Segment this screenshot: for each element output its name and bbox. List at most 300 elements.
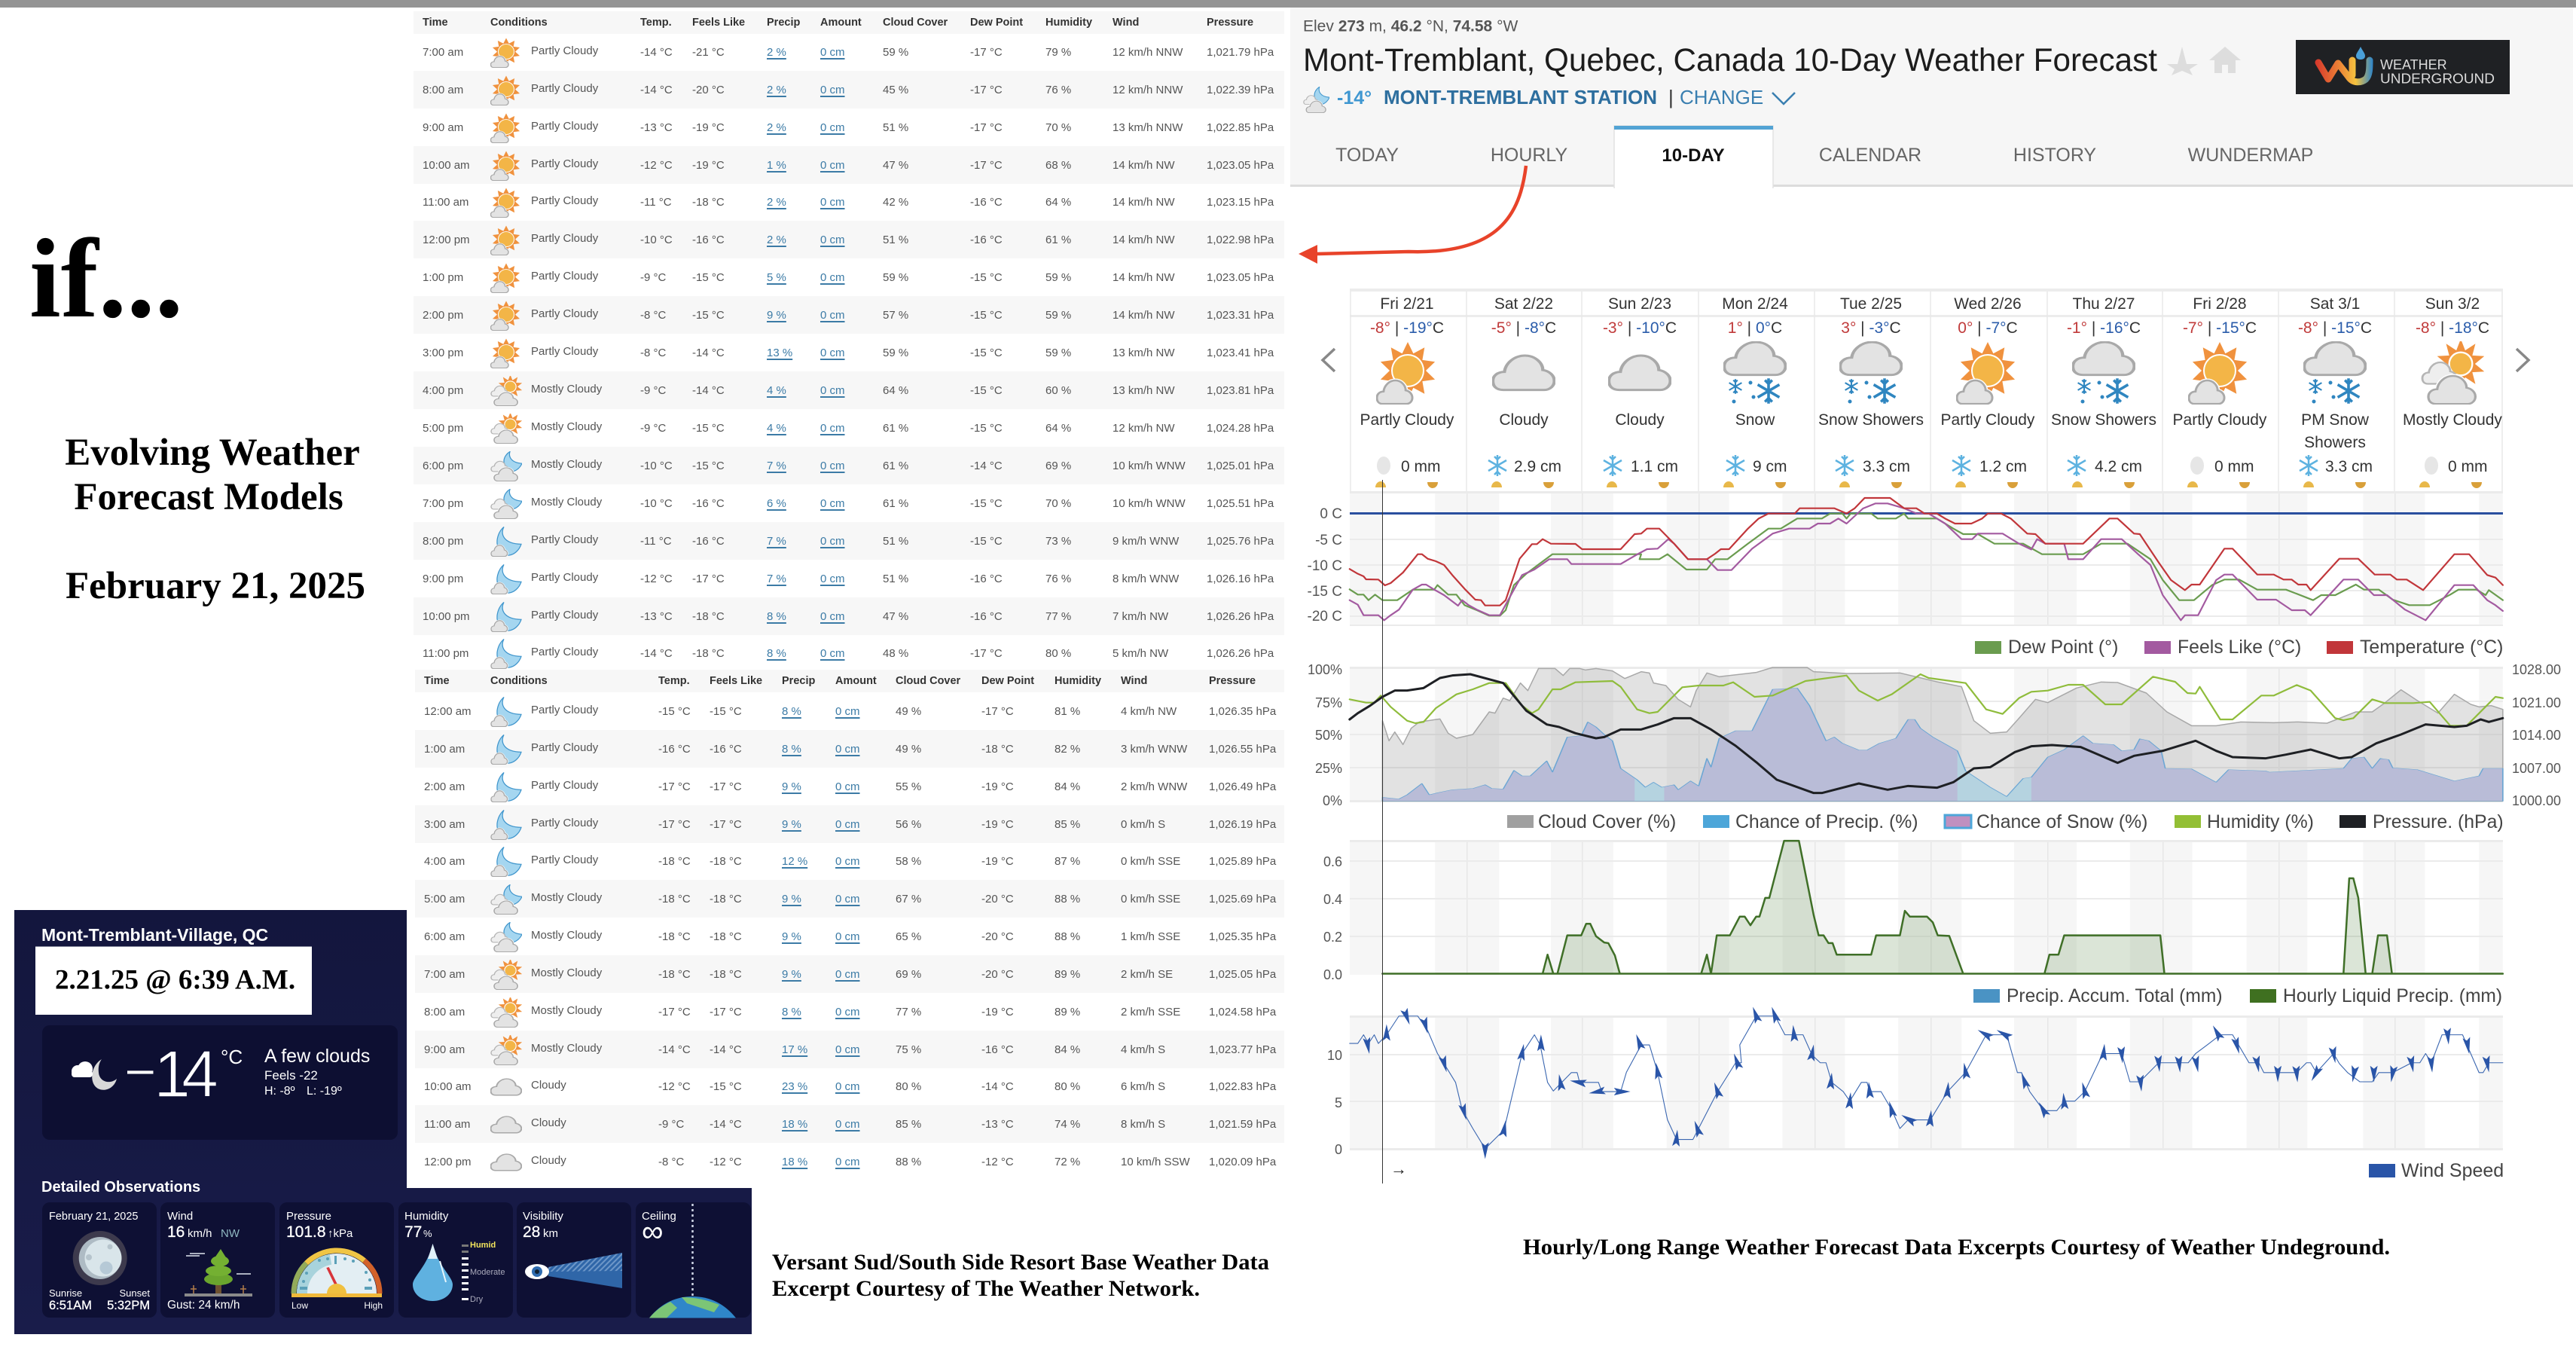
icon: star <box>2167 47 2198 75</box>
row: 9:00 am: 0 cm <box>820 121 845 134</box>
temperature axis labels: -10 C <box>1308 558 1342 574</box>
card: pressure: High <box>364 1300 383 1311</box>
row: 12:00 pm <box>414 221 1284 258</box>
precipitation legend: Hourly Liquid Precip. (mm) <box>2283 986 2502 1006</box>
row: 10:00 pm: 10:00 pm <box>423 610 470 623</box>
card: date and moon: 5:32PM <box>107 1299 150 1312</box>
condition text: H: -8º <box>264 1085 295 1098</box>
pressure axis labels: 1014.00 <box>2512 728 2561 743</box>
row: 7:00 am: 89 % <box>1055 968 1080 981</box>
row: 5:00 am: 0 cm <box>835 893 860 906</box>
row: 3:00 am <box>415 805 1284 843</box>
row: 2:00 am: -17 °C <box>658 780 691 793</box>
day: Wed 2/26: Partly Cloudy <box>1941 411 2035 429</box>
cloud and precipitation legend: Cloud Cover (%) <box>1538 812 1676 832</box>
row: 5:00 pm: 1,024.28 hPa <box>1207 422 1274 435</box>
logo: Weather Underground: WEATHER <box>2380 57 2447 72</box>
row: 9:00 am: 4 km/h S <box>1121 1043 1165 1056</box>
day: Tue 2/25: 3.3 cm <box>1863 458 1910 475</box>
day: Fri 2/28: Fri 2/28 <box>2193 295 2247 313</box>
day: Sun 2/23: Cloudy <box>1615 411 1665 429</box>
row: 11:00 am: 0 cm <box>835 1118 860 1131</box>
row: 1:00 am: 0 cm <box>835 743 860 756</box>
row: 10:00 am: -17 °C <box>970 159 1003 172</box>
current time marker line <box>1382 480 1383 1183</box>
table header row: Feels Like <box>692 17 745 29</box>
row: 3:00 am: 9 % <box>782 818 801 831</box>
card: wind: km/h <box>188 1227 212 1240</box>
card: date and moon: Sunset <box>120 1287 150 1299</box>
navigation tabs: 10-DAY <box>1662 145 1725 166</box>
day: Sat 3/1: PM Snow <box>2301 411 2370 429</box>
row: 5:00 am: 67 % <box>896 893 921 906</box>
row: 8:00 am: 8 % <box>782 1006 801 1019</box>
temperature: – <box>127 1043 154 1095</box>
day: Sat 2/22 <box>1488 295 1561 488</box>
row: 5:00 am <box>415 880 1284 918</box>
row: 11:00 am: 1,021.59 hPa <box>1209 1118 1276 1131</box>
row: 6:00 am: 88 % <box>1055 930 1080 943</box>
table header row: Pressure <box>1209 675 1256 687</box>
row: 1:00 pm: 14 km/h NW <box>1113 271 1175 284</box>
day: Fri 2/21: Partly Cloudy <box>1360 411 1454 429</box>
day: Fri 2/21: 0 mm <box>1401 458 1440 475</box>
row: 2:00 pm: 57 % <box>883 309 908 322</box>
caption: Weather Network credit: Versant Sud/South Side Resort Base Weather Data <box>772 1250 1269 1275</box>
row: 10:00 pm <box>414 597 1284 635</box>
row: 9:00 pm: -16 °C <box>970 573 1003 585</box>
row: 9:00 am <box>423 113 1274 143</box>
day: Sun 3/2: 0 mm <box>2448 458 2487 475</box>
row: 2:00 pm <box>414 296 1284 334</box>
row: 8:00 am: 0 cm <box>820 84 845 96</box>
row: 4:00 am: Partly Cloudy <box>531 854 598 866</box>
row: 7:00 pm: Mostly Cloudy <box>531 496 602 508</box>
row: 11:00 pm <box>423 639 1274 669</box>
temperature line <box>1350 498 2503 606</box>
row: 11:00 pm: 0 cm <box>820 647 845 660</box>
card: ceiling <box>636 1202 751 1318</box>
temperature axis labels: -15 C <box>1308 584 1342 600</box>
row: 6:00 pm: -14 °C <box>970 460 1003 472</box>
table header row: Humidity <box>1045 17 1092 29</box>
row: 12:00 am: 8 % <box>782 705 801 718</box>
small direction arrow: → <box>1390 1159 1407 1178</box>
row: 2:00 am <box>424 772 1276 802</box>
row: 5:00 am: Mostly Cloudy <box>531 891 602 904</box>
card: pressure: Low <box>291 1300 308 1311</box>
row: 5:00 am: 9 % <box>782 893 801 906</box>
navigation tabs: HISTORY <box>2013 145 2096 166</box>
row: 10:00 am: -12 °C <box>658 1080 691 1093</box>
day: Thu 2/27: 4.2 cm <box>2095 458 2142 475</box>
temperature unit: °C <box>221 1046 243 1068</box>
row: 11:00 am: -11 °C <box>640 196 672 209</box>
row: 2:00 am: 1,026.49 hPa <box>1209 780 1276 793</box>
row: 9:00 am <box>415 1031 1284 1068</box>
row: 6:00 am: Mostly Cloudy <box>531 929 602 942</box>
row: 11:00 am: 18 % <box>782 1118 807 1131</box>
condition text: A few clouds <box>264 1046 370 1067</box>
row: 8:00 am <box>424 997 1276 1028</box>
table header row: Conditions <box>490 17 548 29</box>
table header row: Feels Like <box>710 675 762 687</box>
row: 9:00 pm <box>423 564 1274 594</box>
row: 9:00 pm: -17 °C <box>692 573 725 585</box>
day: Fri 2/21: -8° | -19°C <box>1370 319 1444 337</box>
pressure axis labels: 1028.00 <box>2512 662 2561 677</box>
row: 12:00 am: -17 °C <box>981 705 1014 718</box>
wind axis labels <box>1327 1048 1342 1157</box>
card: pressure: 101.8 <box>286 1223 326 1241</box>
row: 8:00 am: 89 % <box>1055 1006 1080 1019</box>
row: 6:00 am <box>424 922 1276 952</box>
day: Sat 2/22: -5° | -8°C <box>1491 319 1556 337</box>
row: 7:00 am: -18 °C <box>658 968 691 981</box>
logo: Weather Underground <box>2296 40 2510 94</box>
temperature legend: Dew Point (°) <box>2008 637 2118 658</box>
row: 8:00 am: Mostly Cloudy <box>531 1004 602 1017</box>
row: 12:00 am: -15 °C <box>658 705 691 718</box>
row: 5:00 pm <box>423 414 1274 444</box>
day: Sun 2/23: -3° | -10°C <box>1603 319 1677 337</box>
row: 3:00 pm: 59 % <box>1045 347 1071 359</box>
row: 11:00 pm: 1,026.26 hPa <box>1207 647 1274 660</box>
row: 12:00 pm: 1,020.09 hPa <box>1209 1156 1276 1168</box>
elevation line: Elev 273 m, 46.2 °N, 74.58 °W <box>1303 18 1518 35</box>
row: 5:00 am: -18 °C <box>658 893 691 906</box>
row: 9:00 am: 13 km/h NNW <box>1113 121 1183 134</box>
row: 4:00 am: -18 °C <box>658 855 691 868</box>
pressure axis labels: 1007.00 <box>2512 761 2561 776</box>
table header row: Cloud Cover <box>896 675 960 687</box>
navigation tabs <box>1335 126 2313 188</box>
row: 5:00 pm: 64 % <box>1045 422 1071 435</box>
row: 10:00 am: 0 cm <box>820 159 845 172</box>
day: Sun 3/2 <box>2403 295 2502 488</box>
table header row: Conditions <box>490 675 548 687</box>
day: Wed 2/26: 0° | -7°C <box>1958 319 2018 337</box>
day: Sun 3/2: Mostly Cloudy <box>2403 411 2502 429</box>
location heading: Mont-Tremblant-Village, QC <box>41 925 268 945</box>
card: humidity <box>398 1202 513 1318</box>
row: 4:00 pm: 4 % <box>767 384 786 397</box>
row: 12:00 pm: 51 % <box>883 234 908 246</box>
row: 9:00 am: 84 % <box>1055 1043 1080 1056</box>
row: 5:00 am: -18 °C <box>710 893 742 906</box>
row: 7:00 am: Mostly Cloudy <box>531 967 602 979</box>
row: 6:00 pm: 1,025.01 hPa <box>1207 460 1274 472</box>
row: 12:00 pm: -10 °C <box>640 234 673 246</box>
table header row: Temp. <box>640 17 672 29</box>
row: 10:00 am <box>414 146 1284 184</box>
row: 10:00 pm: 47 % <box>883 610 908 623</box>
row: 7:00 am: -21 °C <box>692 46 725 59</box>
row: 8:00 am: -17 °C <box>970 84 1003 96</box>
row: 1:00 pm: 59 % <box>883 271 908 284</box>
row: 10:00 pm: 7 km/h NW <box>1113 610 1168 623</box>
table header row: Amount <box>820 17 862 29</box>
row: 9:00 pm: -12 °C <box>640 573 673 585</box>
row: 6:00 pm: 69 % <box>1045 460 1071 472</box>
row: 3:00 am: 0 cm <box>835 818 860 831</box>
row: 1:00 am: 8 % <box>782 743 801 756</box>
row: 1:00 pm: -15 °C <box>692 271 725 284</box>
row: 4:00 am: 87 % <box>1055 855 1080 868</box>
row: 12:00 pm: 61 % <box>1045 234 1071 246</box>
row: 7:00 am: -20 °C <box>981 968 1014 981</box>
row: 7:00 pm: 7:00 pm <box>423 497 463 510</box>
condition text: Feels -22 <box>264 1068 318 1083</box>
row: 8:00 am: 12 km/h NNW <box>1113 84 1183 96</box>
row: 1:00 pm: 1:00 pm <box>423 271 463 284</box>
row: 6:00 pm: 61 % <box>883 460 908 472</box>
row: 9:00 am: 70 % <box>1045 121 1071 134</box>
day: Tue 2/25: Tue 2/25 <box>1840 295 1902 313</box>
day: Sun 3/2: -8° | -18°C <box>2416 319 2489 337</box>
row: 11:00 am <box>415 1105 1284 1143</box>
row: 9:00 am: 9:00 am <box>423 121 463 134</box>
row: 11:00 pm: 11:00 pm <box>423 647 469 660</box>
row: 2:00 am: 55 % <box>896 780 921 793</box>
cloud and precipitation legend <box>1507 812 2504 832</box>
row: 7:00 am: -17 °C <box>970 46 1003 59</box>
day: Sat 3/1 <box>2298 295 2373 488</box>
day: Thu 2/27: Snow Showers <box>2051 411 2156 429</box>
row: 1:00 pm: -9 °C <box>640 271 666 284</box>
row: 12:00 pm: -16 °C <box>692 234 725 246</box>
row: 1:00 pm: Partly Cloudy <box>531 270 598 282</box>
table header row: Time <box>424 675 450 687</box>
row: 1:00 am: 82 % <box>1055 743 1080 756</box>
row: 10:00 am: -12 °C <box>640 159 673 172</box>
row: 10:00 am: 14 km/h NW <box>1113 159 1175 172</box>
card: pressure <box>279 1202 394 1318</box>
row: 4:00 pm <box>414 371 1284 409</box>
current conditions card <box>42 1025 398 1140</box>
row: 4:00 pm: -14 °C <box>692 384 725 397</box>
row: 12:00 pm: 10 km/h SSW <box>1121 1156 1190 1168</box>
row: 12:00 am: 4 km/h NW <box>1121 705 1177 718</box>
row: 2:00 pm: -15 °C <box>692 309 725 322</box>
row: 9:00 pm: 76 % <box>1045 573 1071 585</box>
day: Thu 2/27 <box>2051 295 2156 488</box>
precipitation legend <box>1973 986 2502 1006</box>
row: 6:00 pm: 0 cm <box>820 460 845 472</box>
row: 8:00 pm: 0 cm <box>820 535 845 548</box>
row: 3:00 pm: -8 °C <box>640 347 666 359</box>
row: 8:00 am: 1,024.58 hPa <box>1209 1006 1276 1019</box>
row: 7:00 am: 1,025.05 hPa <box>1209 968 1276 981</box>
row: 9:00 am: 51 % <box>883 121 908 134</box>
card: humidity: % <box>423 1228 432 1239</box>
day: Sat 3/1: Sat 3/1 <box>2310 295 2360 313</box>
row: 7:00 am: 2 km/h SE <box>1121 968 1173 981</box>
row: 11:00 am: -9 °C <box>658 1118 684 1131</box>
row: 11:00 am: -14 °C <box>710 1118 742 1131</box>
row: 8:00 pm: 73 % <box>1045 535 1071 548</box>
row: 9:00 pm: 9:00 pm <box>423 573 463 585</box>
row: 12:00 am: 12:00 am <box>424 705 472 718</box>
row: 11:00 pm: Partly Cloudy <box>531 646 598 658</box>
row: 2:00 pm: 0 cm <box>820 309 845 322</box>
percent axis labels <box>1308 662 1342 808</box>
row: 6:00 am: -18 °C <box>658 930 691 943</box>
row: 1:00 am: -16 °C <box>710 743 742 756</box>
row: 8:00 am: -20 °C <box>692 84 725 96</box>
row: 4:00 pm: 64 % <box>883 384 908 397</box>
row: 9:00 am: -13 °C <box>640 121 673 134</box>
row: 5:00 am: 5:00 am <box>424 893 465 906</box>
row: 8:00 pm: 1,025.76 hPa <box>1207 535 1274 548</box>
row: 5:00 pm: -9 °C <box>640 422 666 435</box>
row: 2:00 pm: -8 °C <box>640 309 666 322</box>
row: 2:00 am: 2 km/h WNW <box>1121 780 1187 793</box>
row: 11:00 am: 1,023.15 hPa <box>1207 196 1274 209</box>
row: 8:00 pm: 9 km/h WNW <box>1113 535 1179 548</box>
day: Sun 3/2: Sun 3/2 <box>2425 295 2480 313</box>
row: 2:00 am: Partly Cloudy <box>531 779 598 792</box>
card: date and moon: February 21, 2025 <box>49 1211 139 1223</box>
row: 7:00 am: 1,021.79 hPa <box>1207 46 1274 59</box>
row: 4:00 pm: Mostly Cloudy <box>531 383 602 396</box>
row: 12:00 pm: Partly Cloudy <box>531 232 598 245</box>
row: 3:00 am: 1,026.19 hPa <box>1209 818 1276 831</box>
row: 10:00 pm: -16 °C <box>970 610 1003 623</box>
card: wind: Gust: 24 km/h <box>167 1299 240 1312</box>
percent axis labels: 75% <box>1315 695 1342 710</box>
temperature axis labels <box>1308 506 1342 625</box>
row: 7:00 pm: 0 cm <box>820 497 845 510</box>
row: 10:00 am: 80 % <box>1055 1080 1080 1093</box>
cloud and precipitation legend: Pressure. (hPa) <box>2373 812 2504 832</box>
caption: Weather Underground credit: Hourly/Long Range Weather Forecast Data Excerpts Courtesy of Weather Undeground. <box>1523 1235 2390 1260</box>
row: 6:00 am: -20 °C <box>981 930 1014 943</box>
table header row: Humidity <box>1055 675 1101 687</box>
row: 11:00 am: 0 cm <box>820 196 845 209</box>
day: Fri 2/28: 0 mm <box>2214 458 2254 475</box>
row: 9:00 pm: 8 km/h WNW <box>1113 573 1179 585</box>
row: 9:00 am: -17 °C <box>970 121 1003 134</box>
row: 3:00 am: 0 km/h S <box>1121 818 1165 831</box>
wind axis labels: 0 <box>1335 1142 1342 1157</box>
row: 10:00 am: 1,022.83 hPa <box>1209 1080 1276 1093</box>
row: 1:00 pm <box>423 264 1274 293</box>
table header row: Wind <box>1121 675 1147 687</box>
row: 8:00 am: 8:00 am <box>424 1006 465 1019</box>
hourly liquid precipitation area <box>1382 841 2503 973</box>
row: 12:00 am: 49 % <box>896 705 921 718</box>
timestamp box: 2.21.25 @ 6:39 A.M. <box>55 965 295 996</box>
row: 7:00 pm: 70 % <box>1045 497 1071 510</box>
row: 12:00 am <box>424 697 1276 727</box>
row: 12:00 am: Partly Cloudy <box>531 704 598 716</box>
row: 12:00 pm: 18 % <box>782 1156 807 1168</box>
row: 11:00 am: 8 km/h S <box>1121 1118 1165 1131</box>
row: 3:00 pm: -15 °C <box>970 347 1003 359</box>
row: 7:00 am: 79 % <box>1045 46 1071 59</box>
row: 12:00 pm: -12 °C <box>710 1156 742 1168</box>
page title: Mont-Tremblant, Quebec, Canada 10-Day Weather Forecast <box>1303 42 2157 78</box>
row: 10:00 am: 47 % <box>883 159 908 172</box>
row: 12:00 pm: -16 °C <box>970 234 1003 246</box>
row: 9:00 am: Partly Cloudy <box>531 120 598 133</box>
row: 11:00 am: -18 °C <box>692 196 725 209</box>
row: 5:00 pm: 61 % <box>883 422 908 435</box>
icon: moon and cloud <box>72 1059 117 1090</box>
percent axis labels: 100% <box>1308 662 1342 677</box>
day: Thu 2/27: Thu 2/27 <box>2073 295 2135 313</box>
row: 9:00 pm: 51 % <box>883 573 908 585</box>
row: 2:00 pm: -15 °C <box>970 309 1003 322</box>
icon: full moon <box>73 1231 127 1285</box>
navigation tabs: CALENDAR <box>1819 145 1921 166</box>
row: 12:00 pm: -12 °C <box>981 1156 1014 1168</box>
pressure axis labels: 1021.00 <box>2512 695 2561 710</box>
card: wind: NW <box>221 1227 240 1240</box>
row: 7:00 am: -14 °C <box>640 46 673 59</box>
row: 11:00 am: 42 % <box>883 196 908 209</box>
row: 11:00 am: -13 °C <box>981 1118 1014 1131</box>
row: 6:00 am: 1 km/h SSE <box>1121 930 1180 943</box>
row: 11:00 pm: 8 % <box>767 647 786 660</box>
row: 1:00 pm: 1,023.05 hPa <box>1207 271 1274 284</box>
row: 12:00 am: 1,026.35 hPa <box>1209 705 1276 718</box>
chart: precipitation accumulation <box>1323 840 2503 1006</box>
row: 2:00 pm: 2:00 pm <box>423 309 463 322</box>
card: date and moon: Sunrise <box>49 1287 82 1299</box>
icon: previous arrow <box>1323 349 1335 371</box>
row: 3:00 pm: -14 °C <box>692 347 725 359</box>
humidity scale: Humid <box>470 1241 496 1250</box>
row: 10:00 am: -19 °C <box>692 159 725 172</box>
card: pressure: ↑kPa <box>328 1227 353 1240</box>
wind legend: Wind Speed <box>2401 1160 2504 1181</box>
cloud and precipitation legend: Humidity (%) <box>2207 812 2314 832</box>
icon: eye and view beam <box>525 1253 622 1288</box>
row: 4:00 am: -18 °C <box>710 855 742 868</box>
row: 1:00 pm: -15 °C <box>970 271 1003 284</box>
row: 11:00 am: 11:00 am <box>423 196 469 209</box>
row: 5:00 pm: 12 km/h NW <box>1113 422 1175 435</box>
row: 9:00 am: 17 % <box>782 1043 807 1056</box>
heading: detailed observations: Detailed Observations <box>41 1179 200 1196</box>
row: 3:00 am: 56 % <box>896 818 921 831</box>
day: Thu 2/27: -1° | -16°C <box>2067 319 2141 337</box>
row: 8:00 pm: 51 % <box>883 535 908 548</box>
day: Tue 2/25: 3° | -3°C <box>1841 319 1901 337</box>
humidity line <box>1350 674 2503 725</box>
table header row: Time <box>423 17 448 29</box>
table header row <box>415 670 1284 692</box>
card: humidity: Humidity <box>404 1210 449 1223</box>
day: Fri 2/21: Fri 2/21 <box>1380 295 1434 313</box>
row: 2:00 am: 2:00 am <box>424 780 465 793</box>
temperature axis labels: -5 C <box>1315 533 1342 548</box>
icon: globe with dotted ceiling line <box>649 1204 736 1318</box>
row: 3:00 am: 85 % <box>1055 818 1080 831</box>
day: Sat 2/22: 2.9 cm <box>1514 458 1561 475</box>
row: 7:00 am: 0 cm <box>820 46 845 59</box>
row: 8:00 am: 77 % <box>896 1006 921 1019</box>
card: ceiling: ∞ <box>642 1215 664 1248</box>
day: Fri 2/28 <box>2173 295 2267 488</box>
day: Wed 2/26: 1.2 cm <box>1979 458 2027 475</box>
row: 9:00 am: 1,023.77 hPa <box>1209 1043 1276 1056</box>
row: 5:00 am: 0 km/h SSE <box>1121 893 1180 906</box>
row: 4:00 pm: 60 % <box>1045 384 1071 397</box>
row: 7:00 pm: -16 °C <box>692 497 725 510</box>
